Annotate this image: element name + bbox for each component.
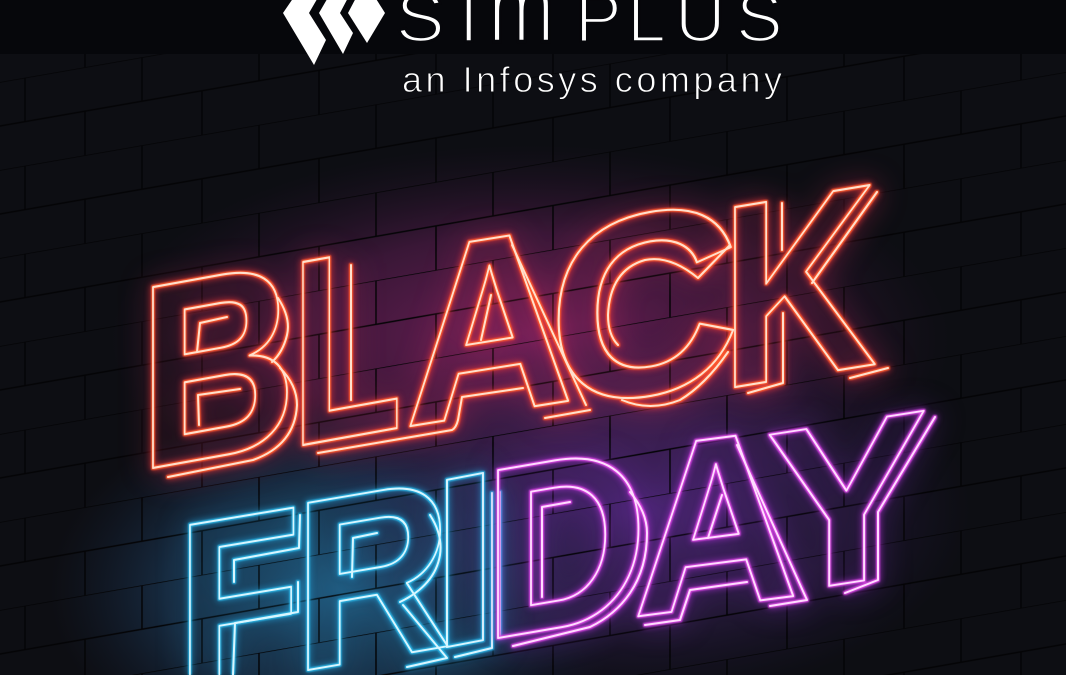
letter A: A	[632, 374, 799, 669]
letter A: A	[404, 171, 574, 482]
neon word: FRI	[176, 417, 500, 675]
letter C: C	[548, 143, 740, 468]
letter B: B	[138, 204, 297, 527]
letter L: L	[291, 186, 402, 504]
offset tube segments for DAY	[513, 417, 935, 646]
neon word: DAY	[483, 359, 935, 675]
offset tube segments for FRI	[233, 492, 500, 675]
top logo band	[0, 0, 1066, 54]
offset tube segments for BLACK	[168, 192, 888, 477]
logo: tagline: an Infosys company	[402, 59, 782, 100]
logo: Simplus diamond mark	[283, 0, 385, 65]
neon word: BLACK	[138, 128, 888, 527]
logo: wordmark SIMPLUS	[396, 0, 783, 64]
letter Y: Y	[766, 359, 928, 645]
letter K: K	[720, 128, 877, 446]
